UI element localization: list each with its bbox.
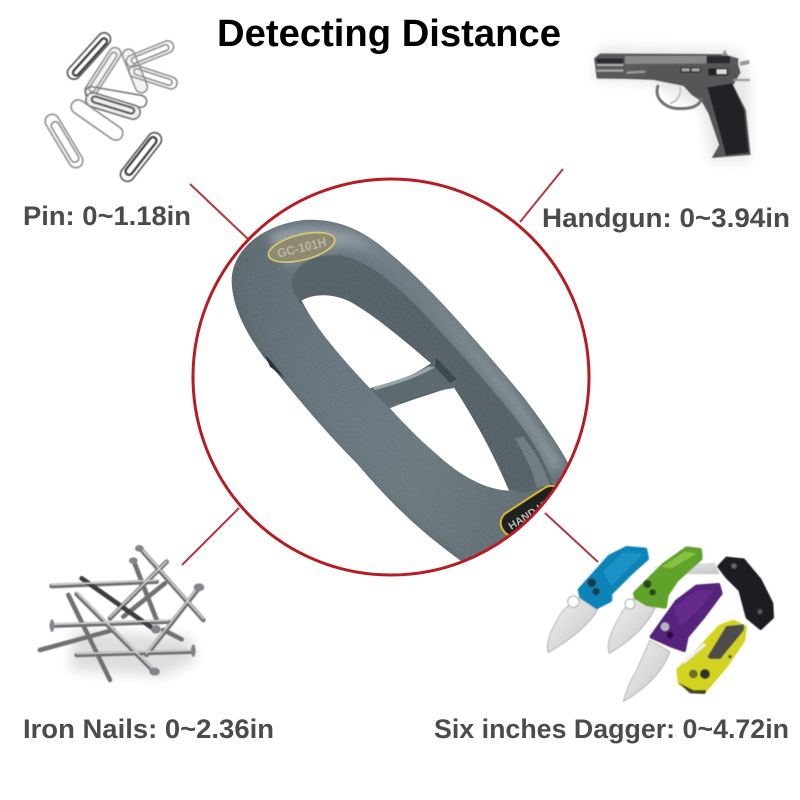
detector upper opening [302, 295, 435, 388]
detector grain [232, 220, 570, 563]
title: Detecting Distance [217, 13, 561, 55]
gun grip [707, 83, 749, 155]
nail heads [50, 545, 204, 676]
icon: iron nails [40, 545, 204, 680]
purple knife [623, 585, 721, 702]
label: handgun: Handgun: 0~3.94in [542, 203, 790, 233]
badge: GC-101H: GC-101H [276, 235, 328, 261]
blue knife [547, 548, 647, 653]
gun sight and hammer [722, 49, 749, 66]
icon: paperclips [43, 30, 179, 184]
nail shafts [40, 548, 203, 680]
connector lines [182, 169, 598, 565]
nail shadow [70, 630, 197, 677]
label: iron nails: Iron Nails: 0~2.36in [23, 714, 274, 744]
yellow knife [678, 622, 745, 694]
label: pin: Pin: 0~1.18in [23, 201, 191, 231]
gun shadow [593, 47, 750, 162]
trigger [670, 87, 680, 103]
detector inner rim [292, 255, 553, 493]
icon: handgun [593, 47, 751, 162]
detector side notch [265, 355, 285, 378]
gun slide [594, 53, 738, 79]
label: dagger: Six inches Dagger: 0~4.72in [434, 714, 789, 744]
nail highlights [52, 547, 203, 670]
detector body [232, 220, 570, 563]
gun frame [625, 65, 751, 158]
icon: knives [547, 548, 772, 702]
black knife [653, 558, 772, 628]
detector lower opening [390, 387, 509, 491]
badge: GC-101H [268, 232, 336, 263]
trigger guard [657, 85, 702, 109]
detector shading [223, 227, 563, 563]
green knife [608, 548, 701, 653]
badge: hand label: HAND HELD [507, 488, 566, 533]
detector rim highlight [515, 437, 550, 488]
metal detector [223, 220, 570, 563]
red circle [193, 179, 589, 575]
badge: hand label [500, 484, 555, 536]
detector crossbar [370, 360, 457, 408]
